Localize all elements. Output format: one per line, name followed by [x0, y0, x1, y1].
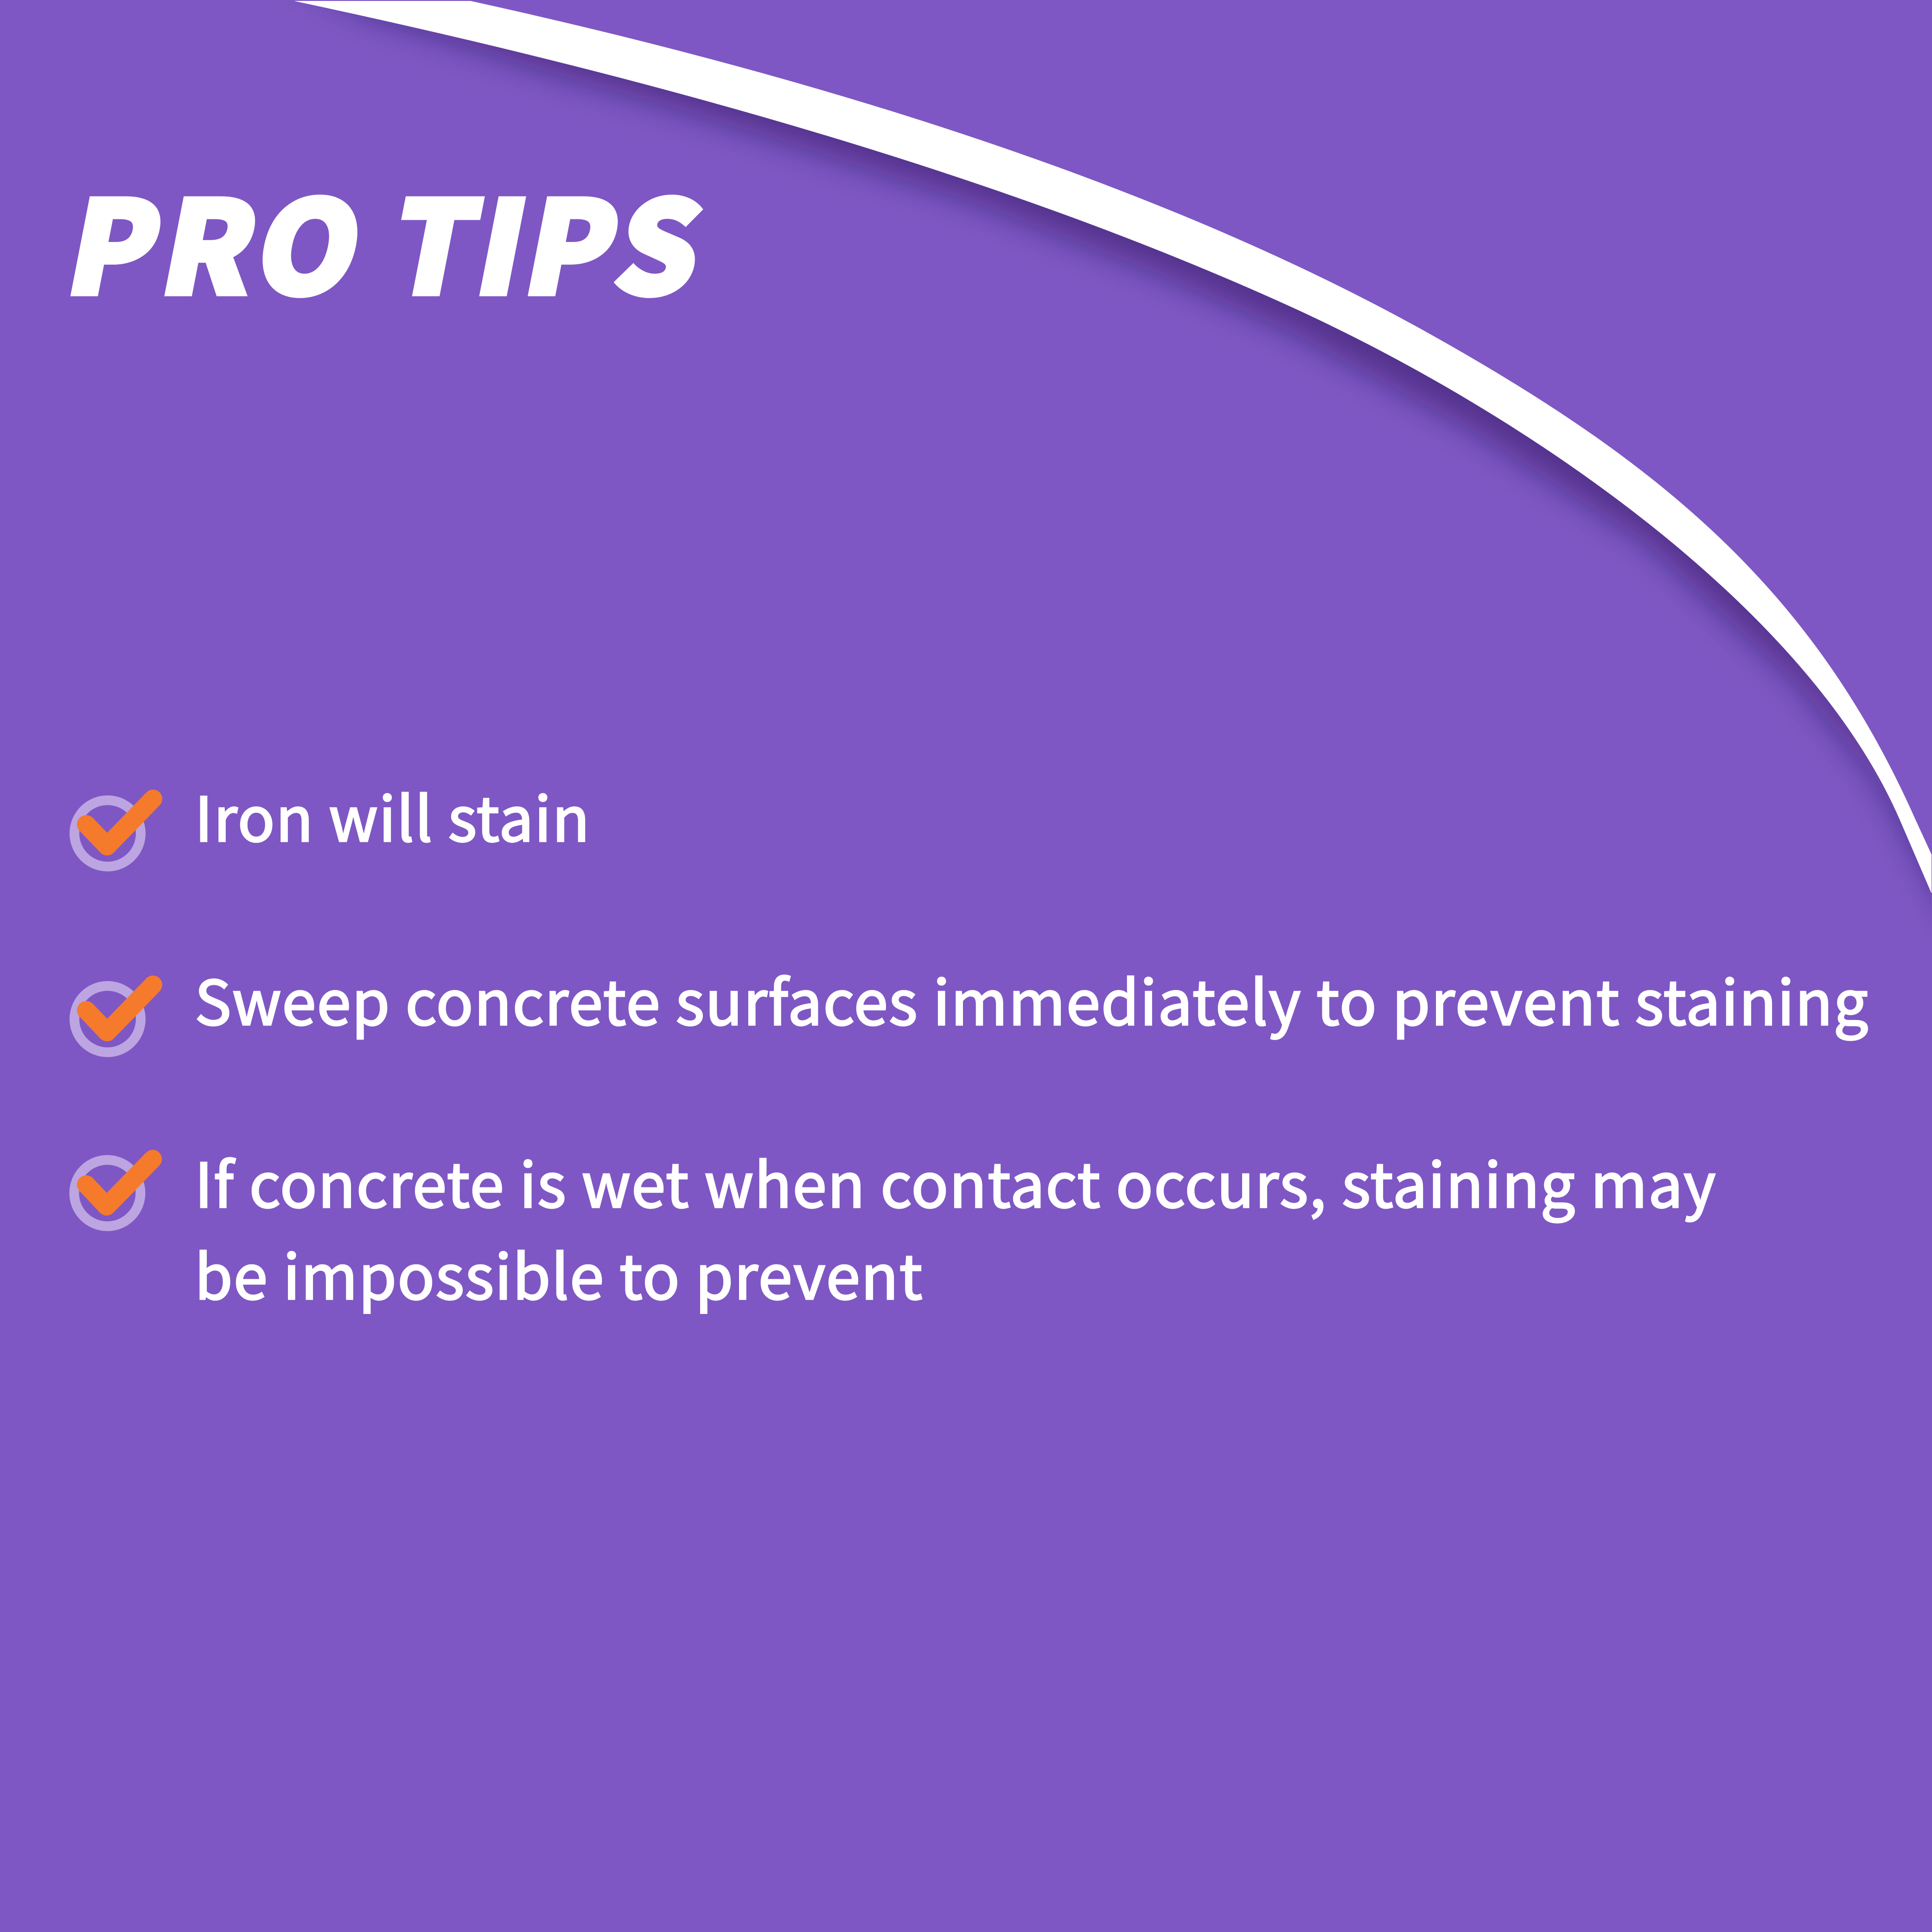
tip text: If concrete is wet when contact occurs, staining may	[195, 1137, 1716, 1225]
icon: check in circle	[74, 799, 153, 867]
white page curl swoosh	[294, 1, 1932, 893]
tip text: Sweep concrete surfaces immediately to prevent staining	[195, 954, 1869, 1043]
title: PRO TIPS	[55, 146, 724, 331]
tip 1	[74, 771, 591, 867]
tip text: Iron will stain	[195, 771, 591, 860]
tip 2	[74, 954, 1869, 1052]
icon: check in circle	[74, 1159, 153, 1226]
page curl shadow	[287, 0, 1932, 927]
tips list	[74, 771, 1869, 1317]
tip 3	[74, 1137, 1716, 1317]
infographic canvas	[70, 1, 1932, 1314]
icon: check in circle	[74, 985, 153, 1052]
tip text: be impossible to prevent	[195, 1229, 924, 1317]
